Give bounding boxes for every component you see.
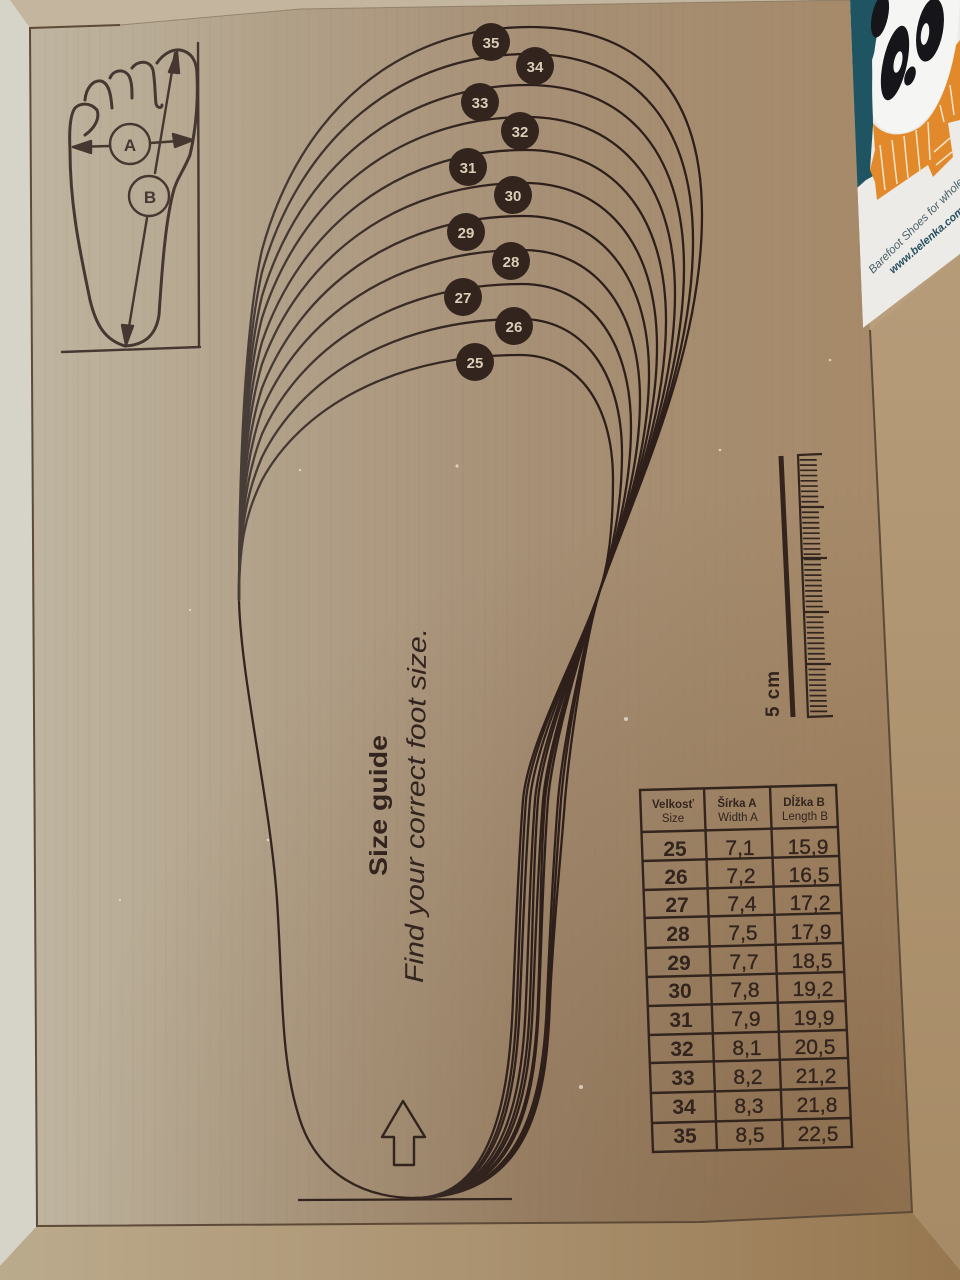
- icon: foot measuring diagram: [62, 43, 200, 352]
- ruler scale 5 cm: [763, 454, 833, 717]
- subheading: find your foot size: Find your correct foot size.: [399, 628, 432, 983]
- table width column: 8,1: [732, 1037, 762, 1060]
- ruler label: 5 cm: [763, 671, 784, 717]
- size badges: 32: [512, 124, 528, 141]
- table length column: 17,9: [791, 921, 831, 944]
- size badges: 34: [527, 59, 544, 76]
- table length column: 21,2: [796, 1065, 836, 1088]
- size badges: 25: [467, 355, 483, 372]
- table size column: 35: [673, 1125, 697, 1148]
- table size column: 26: [664, 866, 688, 889]
- table size column: 28: [666, 923, 690, 946]
- heel baseline: [298, 1199, 512, 1200]
- table width column: [725, 837, 765, 1147]
- table width column: 8,2: [733, 1066, 763, 1089]
- table size column: 29: [667, 952, 691, 975]
- table size column: 30: [668, 980, 692, 1003]
- table width column: 7,1: [725, 837, 755, 860]
- table header: Width A: [718, 812, 758, 824]
- table length column: [788, 836, 838, 1146]
- size badges: [444, 23, 554, 381]
- table length column: 17,2: [790, 892, 830, 915]
- icon: panda: [868, 0, 960, 200]
- size badges: 28: [503, 254, 519, 271]
- size badges: 33: [472, 95, 488, 112]
- table length column: 15,9: [788, 836, 828, 859]
- size badges: 35: [483, 35, 499, 52]
- table header: Velkosť: [652, 799, 694, 811]
- table length column: 20,5: [795, 1036, 835, 1059]
- table size column: 33: [671, 1067, 695, 1090]
- size badges: 27: [455, 290, 471, 307]
- table size column: [663, 838, 697, 1148]
- size badges: 26: [506, 319, 522, 336]
- table length column: 19,9: [794, 1007, 834, 1030]
- table width column: 7,9: [731, 1008, 761, 1031]
- table width column: 7,5: [728, 922, 758, 945]
- card teal background: [850, 0, 878, 188]
- table header: Size: [662, 813, 684, 825]
- table length column: 16,5: [789, 864, 829, 887]
- table length column: 21,8: [797, 1094, 837, 1117]
- table header: Šírka A: [717, 797, 757, 810]
- table width column: 8,5: [735, 1124, 765, 1147]
- table size column: 25: [663, 838, 687, 861]
- foot outlines for sizes 25 to 35: [239, 27, 702, 1198]
- size badges: 30: [505, 188, 521, 205]
- icon: up arrow: [382, 1101, 425, 1165]
- heading: size guide: Size guide: [365, 735, 393, 876]
- table width column: 8,3: [734, 1095, 764, 1118]
- table size column: 31: [669, 1009, 693, 1032]
- table header: Length B: [782, 811, 828, 823]
- table size column: 32: [670, 1038, 694, 1061]
- table length column: 19,2: [793, 978, 833, 1001]
- icon: foot measuring diagram: A: [124, 136, 136, 155]
- table size column: 34: [672, 1096, 696, 1119]
- size table: [640, 785, 852, 1152]
- table width column: 7,4: [727, 893, 757, 916]
- icon: foot measuring diagram: B: [144, 188, 156, 207]
- size badges: 29: [458, 225, 474, 242]
- table width column: 7,7: [729, 951, 759, 974]
- table width column: 7,2: [726, 865, 756, 888]
- table header: [652, 795, 828, 825]
- panda brand card: [850, 0, 960, 328]
- table length column: 22,5: [798, 1123, 838, 1146]
- table header: Dĺžka B: [783, 795, 825, 809]
- table length column: 18,5: [792, 950, 832, 973]
- table width column: 7,8: [730, 979, 760, 1002]
- table size column: 27: [665, 894, 689, 917]
- size badges: 31: [460, 160, 476, 177]
